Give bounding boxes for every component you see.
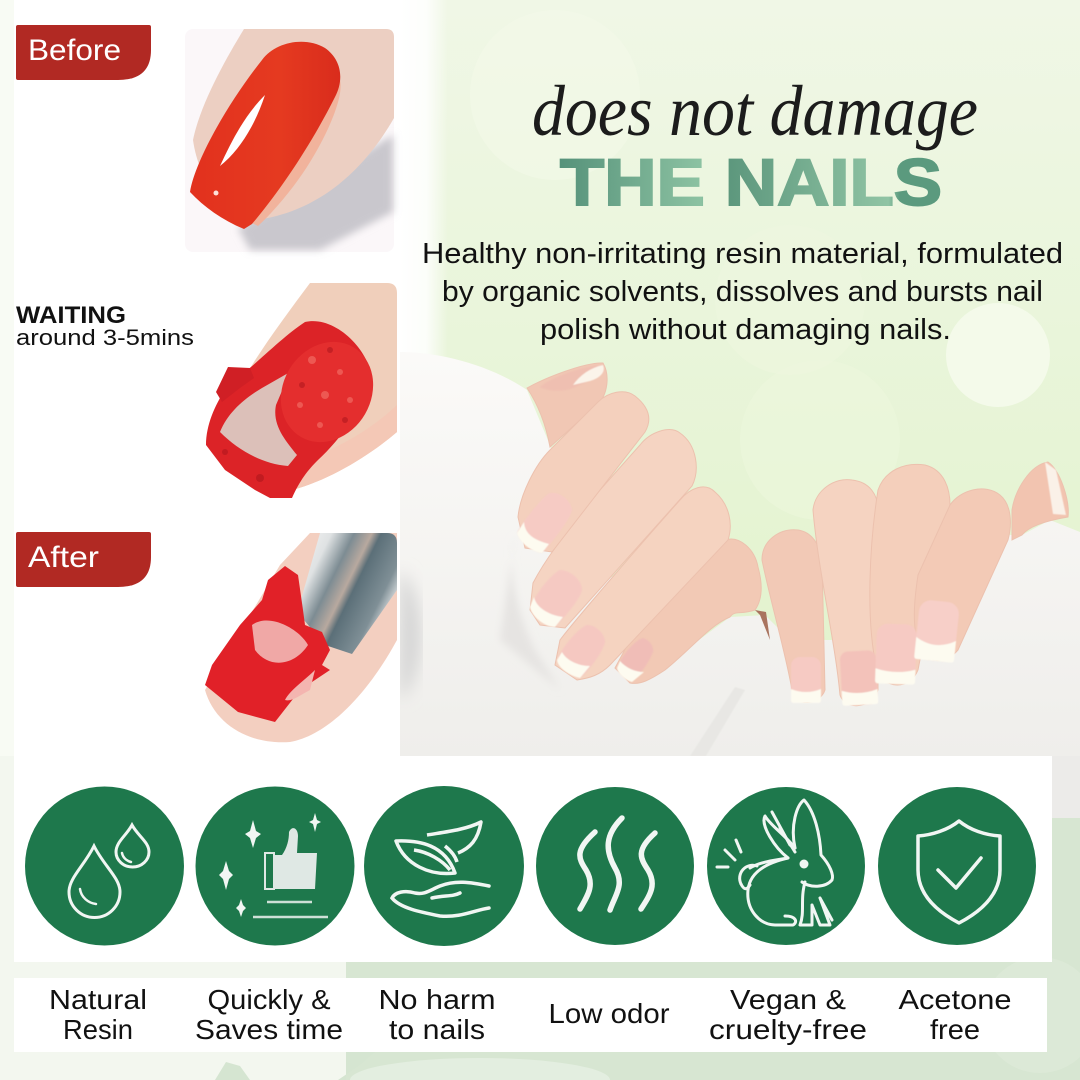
caption: no harm to nails xyxy=(378,984,496,1045)
caption: vegan and cruelty-free: Vegan & xyxy=(730,984,846,1015)
waiting label: around 3-5mins xyxy=(16,325,194,350)
description text xyxy=(422,238,1063,346)
caption: acetone free xyxy=(898,984,1012,1045)
caption: no harm to nails: to nails xyxy=(389,1014,485,1045)
panel: icon row xyxy=(14,756,1052,962)
caption: vegan and cruelty-free xyxy=(709,984,867,1045)
panel: after step xyxy=(16,532,397,742)
caption: quickly and saves time: Saves time xyxy=(195,1014,343,1045)
waiting label: WAITING xyxy=(16,302,126,329)
icon: shield with check xyxy=(878,787,1036,945)
caption: quickly and saves time: Quickly & xyxy=(208,984,331,1015)
white cloth xyxy=(400,352,1080,756)
right hand xyxy=(762,462,1068,706)
before label xyxy=(16,25,151,80)
caption: natural resin: Resin xyxy=(63,1014,133,1045)
before photo xyxy=(185,29,394,252)
waiting label xyxy=(16,302,194,350)
caption: acetone free: free xyxy=(930,1014,980,1045)
description text: by organic solvents, dissolves and bursts nail xyxy=(442,276,1043,308)
icon: hand holding leaf xyxy=(364,786,524,946)
french nails xyxy=(517,365,1066,706)
title bold line: THE NAILS xyxy=(560,145,942,219)
panel: waiting step xyxy=(16,283,397,498)
caption: acetone free: Acetone xyxy=(898,984,1012,1015)
icon: odor waves xyxy=(536,787,694,945)
description text: Healthy non-irritating resin material, formulated xyxy=(422,238,1063,270)
icon: thumbs up with sparkles xyxy=(196,786,354,946)
photo: hands with french manicure on white cloth xyxy=(400,352,1080,756)
icon: rabbit xyxy=(707,787,865,945)
waiting photo xyxy=(206,283,397,498)
after photo xyxy=(205,533,397,742)
caption: vegan and cruelty-free: cruelty-free xyxy=(709,1014,867,1045)
caption: no harm to nails: No harm xyxy=(378,984,496,1015)
panel: before step xyxy=(16,25,394,252)
before label: Before xyxy=(28,34,121,67)
title script line: does not damage xyxy=(532,71,978,151)
heading xyxy=(532,71,978,219)
description text: polish without damaging nails. xyxy=(540,314,951,346)
after label xyxy=(16,532,151,587)
caption: natural resin xyxy=(49,984,147,1045)
panel: icon captions xyxy=(14,978,1047,1052)
caption: low odor: Low odor xyxy=(548,998,670,1029)
icon: water drops xyxy=(25,786,184,946)
caption: quickly and saves time xyxy=(195,984,343,1045)
left hand xyxy=(518,363,770,683)
after label: After xyxy=(28,541,99,574)
caption: natural resin: Natural xyxy=(49,984,147,1015)
